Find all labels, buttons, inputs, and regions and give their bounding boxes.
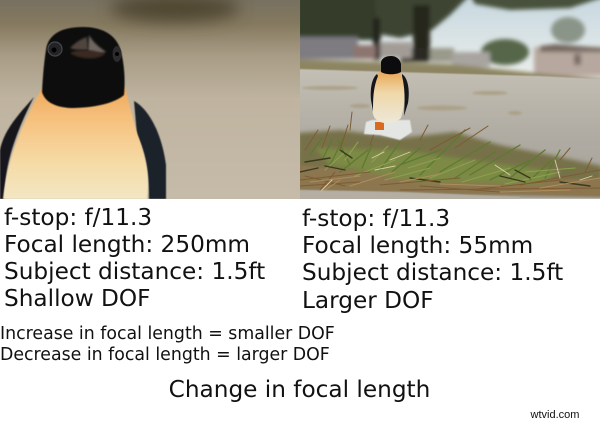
text block: right photo settings: Subject distance: 1.5ft [302,259,563,286]
photo: close-up penguin, shallow depth of field [0,0,300,199]
text block: left photo settings [4,204,265,312]
text block: right photo settings: f-stop: f/11.3 [302,205,450,232]
text block: focal length rules: Decrease in focal length = larger DOF [0,345,330,365]
text block: right photo settings: Focal length: 55mm [302,232,533,259]
blurred trees and houses [296,0,600,84]
road [298,69,600,199]
watermark: wtvid.com: wtvid.com [530,409,579,421]
icon: penguin wings [0,97,166,199]
heading: change in focal length: Change in focal length [169,376,430,403]
text block: right photo settings: Larger DOF [302,287,434,314]
text block: focal length rules [0,324,335,365]
grass clump [298,112,600,197]
text block: right photo settings [302,205,563,314]
icon: penguin head [42,27,125,108]
text block: left photo settings: f-stop: f/11.3 [4,204,152,231]
photo: distant penguin on grass, larger depth of field [296,0,600,201]
text block: left photo settings: Subject distance: 1.5ft [4,258,265,285]
sky [346,0,600,78]
icon: small penguin on paper [364,56,412,140]
text block: left photo settings: Shallow DOF [4,285,150,312]
text block: left photo settings: Focal length: 250mm [4,231,250,258]
icon: penguin belly [3,86,148,199]
base strip [300,190,520,199]
text block: focal length rules: Increase in focal length = smaller DOF [0,324,335,344]
